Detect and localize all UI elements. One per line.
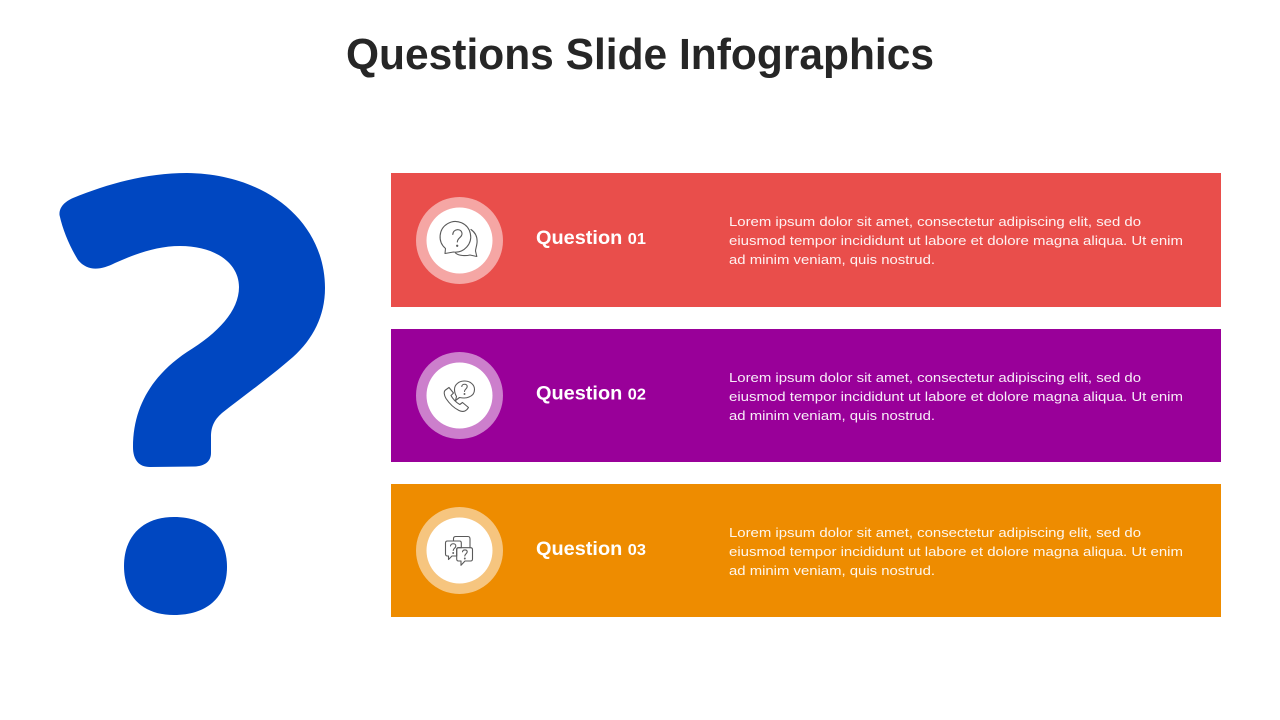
- body text 03: Lorem ipsum dolor sit amet, consectetur adipiscing elit, sed do: [729, 525, 1141, 540]
- body text 02: [729, 370, 1183, 423]
- body text 01: ad minim veniam, quis nostrud.: [729, 252, 935, 267]
- question label 01: Question 01: [536, 227, 646, 249]
- icon: speech bubbles with question mark: [440, 222, 477, 256]
- body text 03: eiusmod tempor incididunt ut labore et dolore magna aliqua. Ut enim: [729, 544, 1183, 559]
- panel: question 02: [391, 329, 1221, 462]
- title: Questions Slide Infographics: [346, 30, 934, 79]
- panel: question 01: [391, 173, 1221, 307]
- icon: large question mark: [59, 173, 325, 615]
- body text 03: ad minim veniam, quis nostrud.: [729, 563, 935, 578]
- question label 02: Question 02: [536, 382, 646, 404]
- body text 02: eiusmod tempor incididunt ut labore et dolore magna aliqua. Ut enim: [729, 389, 1183, 404]
- icon ring: question 02: [416, 352, 503, 439]
- body text 03: [729, 525, 1183, 578]
- body text 01: [729, 214, 1183, 267]
- icon: telephone with question bubble: [444, 381, 474, 411]
- body text 01: eiusmod tempor incididunt ut labore et dolore magna aliqua. Ut enim: [729, 233, 1183, 248]
- body text 01: Lorem ipsum dolor sit amet, consectetur adipiscing elit, sed do: [729, 214, 1141, 229]
- icon ring: question 01: [416, 197, 503, 284]
- question label 03: Question 03: [536, 538, 646, 560]
- body text 02: Lorem ipsum dolor sit amet, consectetur adipiscing elit, sed do: [729, 370, 1141, 385]
- icon ring: question 03: [416, 507, 503, 594]
- body text 02: ad minim veniam, quis nostrud.: [729, 408, 935, 423]
- icon: three question bubbles: [446, 536, 472, 565]
- panel: question 03: [391, 484, 1221, 617]
